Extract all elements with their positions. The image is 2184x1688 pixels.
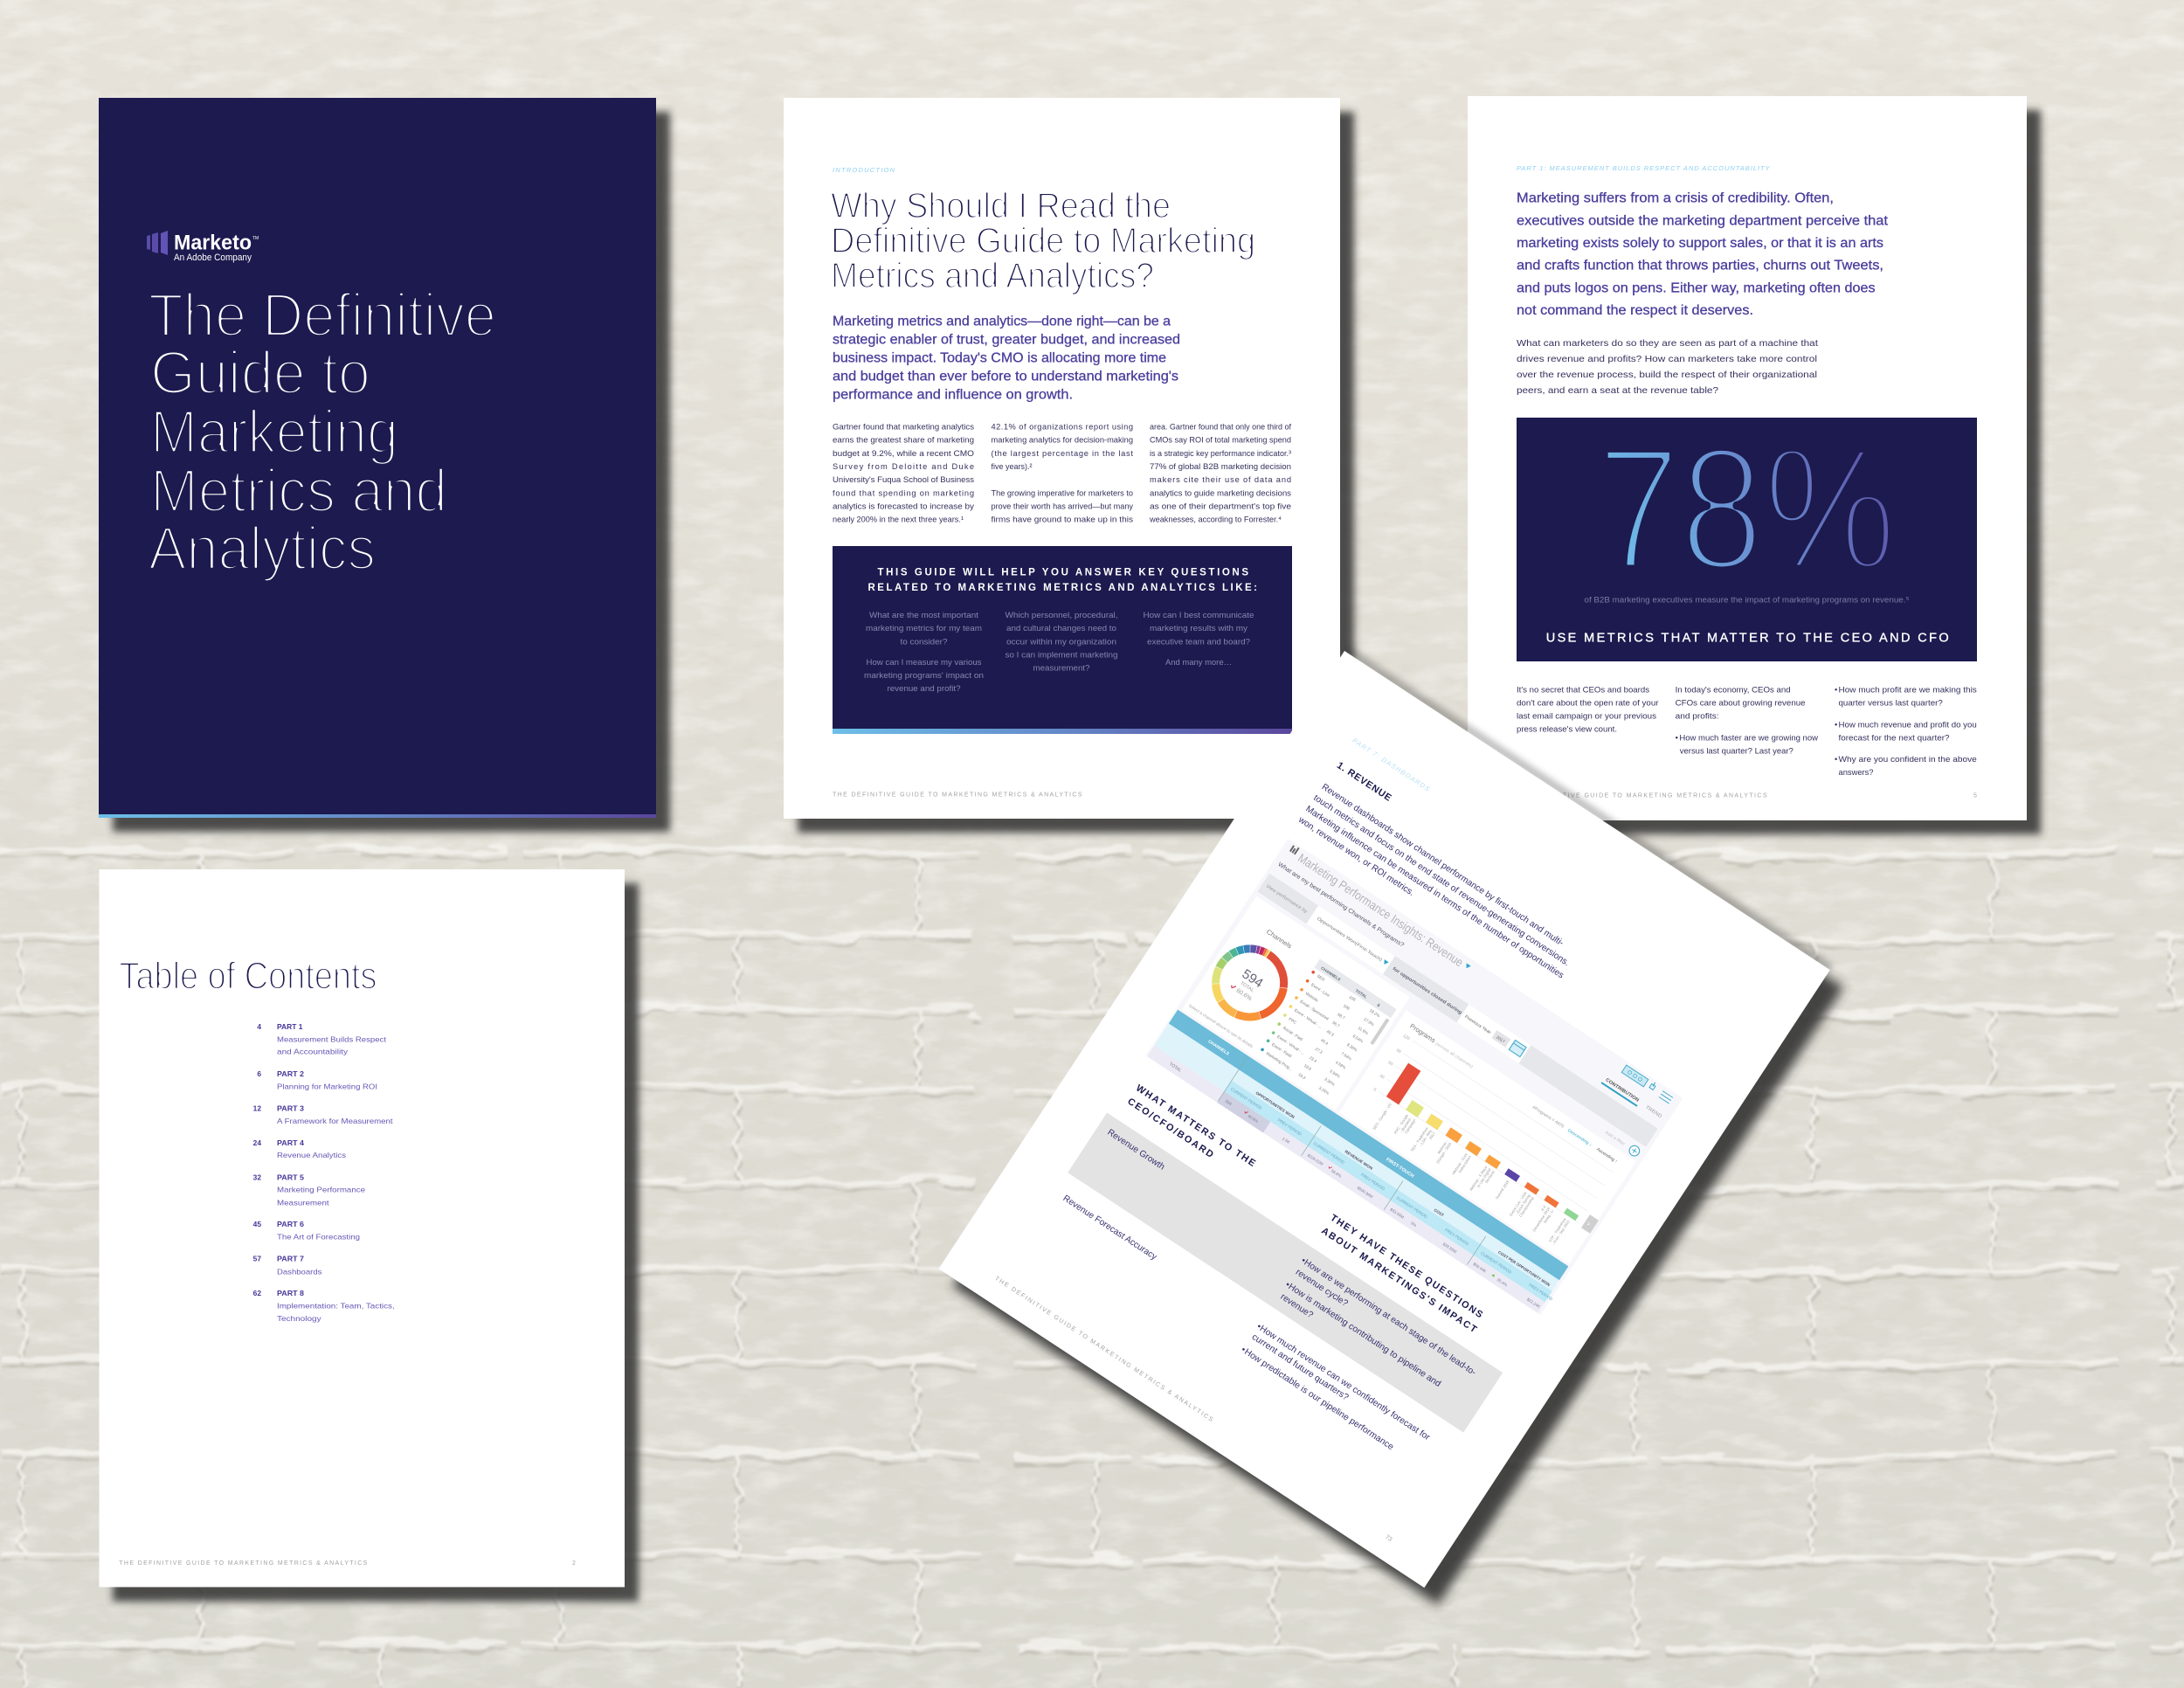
callout: key questions box: And many more…: [1165, 658, 1232, 667]
intro paragraph: Revenue dashboards show channel performance by first-touch and multi-: [1320, 782, 1565, 948]
body column 3: bullets: answers?: [1838, 768, 1873, 777]
programs panel: bar chart: Programs: [1408, 1022, 1437, 1044]
channels table: SEO: [1317, 973, 1326, 982]
first-touch data table: $33.55M: [1442, 1242, 1457, 1254]
intro paragraph: won, revenue won, or ROI metrics.: [1296, 815, 1416, 898]
body column 3: bullets: •: [1835, 686, 1837, 695]
lead paragraph: and crafts function that throws parties, churns out Tweets,: [1517, 259, 1883, 273]
body column 3: bullets: [1835, 686, 1977, 777]
dashboard filter bar: Add a filter: [1604, 1130, 1626, 1147]
contents list: PART 7: [277, 1255, 304, 1263]
dashboard screenshot: [1145, 839, 1684, 1316]
first-touch data table: CURRENT PERIOD: [1230, 1087, 1263, 1110]
section label: INTRODUCTION: [833, 166, 895, 174]
programs panel: bar chart: DGraph - 2016: [1435, 1141, 1453, 1165]
channels table: 9.54%: [1352, 1034, 1364, 1043]
channels table: 19.6: [1303, 1063, 1312, 1071]
lead paragraph: executives outside the marketing department perceive that: [1517, 213, 1889, 228]
lead paragraph: not command the respect it deserves.: [1517, 303, 1753, 318]
first-touch data table: CURRENT PERIOD: [1313, 1141, 1345, 1165]
dashboard filter bar: 2017: [1495, 1035, 1506, 1045]
table row highlight: [1068, 1113, 1503, 1433]
body column 1: don't care about the open rate of your: [1517, 699, 1658, 708]
dashboard filter bar: Opportunities Won(First-Touch): [1316, 917, 1383, 963]
lead paragraph: strategic enabler of trust, greater budget, and increased: [833, 333, 1180, 348]
programs panel: bar chart: Dreamforce 2016: [1531, 1206, 1552, 1233]
dashboard filter bar: for opportunities closed during: [1392, 966, 1462, 1015]
first-touch data table: CURRENT PERIOD: [1480, 1251, 1513, 1275]
dashboard header: Marketing Performance Insights: Revenue: [1296, 851, 1466, 969]
channels table: 11.6%: [1358, 1026, 1369, 1035]
callout: key questions box: revenue and profit?: [888, 684, 961, 693]
page title: Metrics and Analytics?: [831, 255, 1154, 295]
body column 2: •: [1676, 733, 1678, 742]
programs panel: bar chart: YES - Tradeshow: [1410, 1125, 1429, 1152]
contents list: 24: [253, 1138, 261, 1147]
body column 2: The growing imperative for marketers to: [991, 488, 1133, 497]
contents list: 62: [253, 1289, 261, 1297]
programs panel: bar chart: Summit 2018: [1495, 1179, 1510, 1200]
body paragraph: [1517, 338, 1818, 396]
bullets: forecast accuracy questions: How much revenue can we confidently forecast for: [1258, 1324, 1432, 1442]
dashboard toolbar: view, contribution, trend: CONTRIBUTION: [1604, 1077, 1640, 1103]
contents list: PART 8: [277, 1289, 304, 1297]
first-touch data table: PREV PERIOD: [1277, 1117, 1303, 1137]
body column 3: is a strategic key performance indicator.³: [1150, 449, 1291, 458]
programs panel: bar chart: 90: [1395, 1048, 1402, 1055]
callout: key questions box: to consider?: [900, 638, 947, 647]
channels table: Event - Virtual - ...: [1276, 1034, 1305, 1055]
callout: key questions box: RELATED TO MARKETING METRICS AND ANALYTICS LIKE:: [868, 583, 1257, 593]
lead paragraph: [1517, 191, 1889, 318]
intro paragraph: Marketing influence can be measured in terms of the number of opportunities: [1303, 805, 1565, 980]
first-touch data table: OPPORTUNITIES WON: [1255, 1090, 1296, 1120]
bullets: revenue growth questions: •: [1299, 1256, 1308, 1266]
first-touch data table: $56.44K: [1472, 1262, 1488, 1274]
first-touch data table: TOTAL: [1168, 1062, 1183, 1074]
body column 3: bullets: Why are you confident in the above: [1838, 755, 1977, 764]
channels table: 49.3: [1326, 1029, 1335, 1037]
channels table: 106: [1343, 1004, 1351, 1011]
panel: rotated dashboards page: [939, 646, 1834, 1588]
row label: revenue growth: Revenue Growth: [1105, 1128, 1166, 1173]
channels table: 27.3: [1314, 1047, 1324, 1055]
callout: key questions box: marketing results with my: [1150, 624, 1248, 633]
lead paragraph: business impact. Today's CMO is allocating more time: [833, 351, 1166, 366]
first-touch data table: COST PER OPPORTUNITY WON: [1497, 1250, 1552, 1288]
body column 1: earns the greatest share of marketing: [833, 436, 974, 445]
programs panel: bar chart: - Fron - Sep 2015: [1552, 1219, 1571, 1246]
logo: Marketo, An Adobe Company: An Adobe Company: [174, 253, 252, 263]
contents list: PART 1: [277, 1022, 303, 1031]
bullets: forecast accuracy questions: current and future quarters?: [1250, 1332, 1351, 1403]
channels table: PPC: [1288, 1017, 1297, 1025]
body column 1: nearly 200% in the next three years.¹: [833, 515, 964, 523]
channels table: Email - Sponsored: [1299, 1000, 1330, 1021]
cover title: Metrics and: [150, 456, 447, 524]
programs panel: bar chart: - Zurich Spring: [1514, 1193, 1531, 1216]
page title: Definitive Guide to Marketing: [831, 220, 1255, 260]
programs panel: bar chart: - Branded -: [1400, 1116, 1413, 1133]
channels table: Social - Paid: [1282, 1026, 1303, 1041]
body column 2: [991, 423, 1133, 523]
section label: PART 1: MEASUREMENT BUILDS RESPECT AND ACCOUNTABILITY: [1517, 164, 1771, 172]
programs panel: bar chart: (across all channels): [1434, 1041, 1474, 1069]
channels table: 19.3: [1297, 1072, 1307, 1080]
contents list: Marketing Performance: [277, 1185, 365, 1193]
dashboard toolbar: view, contribution, trend: TREND: [1644, 1105, 1662, 1119]
contents list: Planning for Marketing ROI: [277, 1083, 377, 1091]
body column 2: In today's economy, CEOs and: [1676, 685, 1791, 694]
first-touch data table: $500.96M: [1357, 1186, 1374, 1199]
panel: book cover: [99, 98, 656, 818]
page footer: 2: [572, 1560, 576, 1567]
body column 3: analytics to guide marketing decisions: [1150, 488, 1291, 497]
heading: what matters: WHAT MATTERS TO THE: [1134, 1083, 1257, 1169]
channels table: 45.4: [1320, 1038, 1330, 1046]
channels panel: donut chart: 594: [1240, 966, 1266, 991]
contents list: 32: [253, 1173, 261, 1181]
channels table: 4.59%: [1335, 1060, 1346, 1070]
body column 1: press release's view count.: [1517, 725, 1617, 734]
panel: part 1 page: [1468, 96, 2027, 820]
bullets: revenue growth questions: [1276, 1256, 1477, 1413]
page title: Why Should I Read the: [831, 185, 1171, 225]
first-touch data table: PREV PERIOD: [1528, 1283, 1554, 1302]
programs panel: bar chart: A.4.: [1540, 1204, 1547, 1212]
channels table: [1260, 958, 1397, 1101]
contents list: Technology: [277, 1314, 322, 1323]
cover title: The Definitive: [149, 281, 496, 349]
cover title: Guide to: [150, 339, 370, 407]
callout: key questions box: so I can implement marketing: [1005, 651, 1118, 660]
channels table: 7.64%: [1340, 1051, 1352, 1062]
channels table: CHANNELS: [1320, 965, 1341, 982]
contents list: PART 6: [277, 1220, 304, 1228]
row label: revenue forecast accuracy: Revenue Forecast Accuracy: [1061, 1193, 1159, 1263]
first-touch data table: [1147, 1010, 1572, 1316]
body paragraph: drives revenue and profits? How can marketers take more control: [1517, 354, 1817, 364]
body column 2: (the largest percentage in the last: [991, 449, 1133, 458]
first-touch data table: FIRST-TOUCH: [1385, 1157, 1414, 1180]
page footer: [119, 1560, 576, 1567]
contents list: PART 4: [277, 1138, 304, 1147]
body column 1: [1517, 685, 1658, 734]
channels table: $: [1377, 1003, 1381, 1008]
first-touch data table: PREV PERIOD: [1444, 1228, 1470, 1247]
programs panel: bar chart: Event Live - USA: [1509, 1191, 1528, 1217]
cover title: Analytics: [149, 514, 376, 582]
programs panel: bar chart: Webinar - Core: [1451, 1152, 1469, 1175]
intro paragraph: touch metrics and focus on the end state of revenue-generating conversions.: [1311, 793, 1571, 968]
body column 1: Survey from Deloitte and Duke: [833, 462, 974, 471]
first-touch data table: 594: [1225, 1099, 1233, 1106]
programs panel: bar chart: Webinar -: [1436, 1138, 1449, 1155]
programs panel: bar chart: Ascending ↑: [1595, 1147, 1618, 1165]
first-touch data table: $33.55M: [1389, 1207, 1405, 1220]
lead paragraph: performance and influence on growth.: [833, 387, 1073, 402]
channels table: TOTAL: [1355, 988, 1368, 1000]
body column 3: bullets: forecast for the next quarter?: [1838, 733, 1950, 742]
bullets: revenue growth questions: revenue cycle?: [1294, 1268, 1350, 1309]
channels table: 108: [1348, 995, 1357, 1002]
channels table: Event - Virtual - ...: [1294, 1008, 1323, 1029]
programs panel: bar chart: #Programs = 4976: [1531, 1105, 1565, 1130]
contents list: 6: [257, 1069, 261, 1078]
bullets: revenue growth questions: revenue?: [1279, 1292, 1315, 1320]
first-touch data table: CHANNELS: [1206, 1039, 1231, 1057]
section label: PART 7: DASHBOARDS: [1351, 737, 1431, 792]
bullets: forecast accuracy questions: How predictable is our pipeline performance: [1242, 1347, 1395, 1452]
page footer: [992, 1276, 1394, 1543]
programs panel: bar chart: Swag - Li: [1543, 1208, 1554, 1224]
cover title: Marketing: [150, 398, 398, 466]
programs panel: bar chart: 60: [1387, 1060, 1394, 1068]
body column 2: prove their worth has arrived—but many: [991, 502, 1133, 510]
callout: key questions box: and cultural changes need to: [1006, 624, 1116, 633]
bullets: revenue growth questions: How are we performing at each stage of the lead-to-: [1303, 1258, 1477, 1378]
body column 1: budget at 9.2%, while a recent CMO: [833, 449, 974, 458]
body column 3: bullets: quarter versus last quarter?: [1838, 699, 1943, 708]
body column 1: Gartner found that marketing analytics: [833, 423, 974, 432]
programs panel: bar chart: SEO - Google - US: [1372, 1102, 1393, 1131]
callout: key questions box: How can I best communicate: [1143, 611, 1254, 619]
programs panel: bar chart: Championship: [1518, 1195, 1535, 1218]
callout: key questions box: What are the most important: [869, 611, 978, 619]
programs panel: bar chart: PPC - Google: [1393, 1113, 1409, 1135]
channels panel: donut chart: 60.6%: [1235, 988, 1253, 1002]
channels table: Website: [1304, 991, 1319, 1003]
callout: key questions box: How can I measure my various: [867, 658, 982, 667]
contents list: Measurement: [277, 1198, 329, 1207]
channels panel: donut chart: TOTAL: [1240, 981, 1254, 993]
body column 3: 77% of global B2B marketing decision: [1150, 462, 1291, 471]
channels table: 18.2%: [1369, 1008, 1380, 1018]
contents list: The Art of Forecasting: [277, 1232, 360, 1241]
programs panel: bar chart: Webinar - 4 Ways: [1469, 1166, 1488, 1192]
programs panel: bar chart: Subscription: [1457, 1154, 1472, 1173]
lead paragraph: [833, 315, 1180, 402]
contents list: A Framework for Measurement: [277, 1117, 393, 1125]
contents list: [253, 1022, 395, 1323]
programs panel: bar chart: [1339, 1010, 1637, 1264]
logo: Marketo, An Adobe Company: Marketo: [174, 231, 252, 255]
heading: they have these questions: THEY HAVE THESE QUESTIONS: [1328, 1213, 1484, 1320]
contents list: 57: [253, 1255, 261, 1263]
logo: Marketo, An Adobe Company: TM: [252, 236, 259, 241]
body paragraph: What can marketers do so they are seen as part of a machine that: [1517, 338, 1818, 349]
body paragraph: peers, and earn a seat at the revenue table?: [1517, 385, 1718, 396]
body column 2: How much faster are we growing now: [1679, 733, 1818, 742]
page title: Table of Contents: [119, 954, 377, 998]
first-touch data table: PREV PERIOD: [1360, 1173, 1386, 1192]
dashboard filter bar: Previous Year: [1463, 1014, 1492, 1035]
first-touch data table: 56.8%: [1330, 1168, 1342, 1179]
body column 3: area. Gartner found that only one third of: [1150, 423, 1291, 432]
body column 3: weaknesses, according to Forrester.⁴: [1149, 515, 1282, 523]
contents list: 12: [253, 1103, 261, 1112]
channels table: 3.25%: [1318, 1085, 1330, 1096]
bullets: revenue growth questions: •: [1283, 1280, 1291, 1290]
panel: introduction page: [784, 98, 1340, 819]
first-touch data table: 60.6%: [1248, 1114, 1259, 1124]
dashboard filter bar: [1249, 874, 1658, 1159]
programs panel: bar chart: 0: [1372, 1087, 1378, 1093]
body column 3: CMOs say ROI of total marketing spend: [1150, 436, 1291, 445]
contents list: and Accountability: [277, 1047, 349, 1055]
channels table: 56.7: [1331, 1020, 1341, 1028]
body column 3: bullets: How much revenue and profit do you: [1838, 720, 1977, 729]
page footer: THE DEFINITIVE GUIDE TO MARKETING METRICS & ANALYTICS: [993, 1276, 1214, 1423]
bullets: forecast accuracy questions: •: [1239, 1346, 1248, 1355]
programs panel: bar chart: - LSA - May: [1419, 1128, 1433, 1147]
section heading: 1. REVENUE: [1335, 760, 1393, 804]
body column 1: It's no secret that CEOs and boards: [1517, 685, 1649, 694]
programs panel: bar chart: Descending ↓: [1566, 1128, 1593, 1148]
body column 3: bullets: How much profit are we making this: [1838, 686, 1977, 695]
body column 3: as one of their department's top five: [1150, 502, 1291, 510]
programs panel: bar chart: to Use Digital: [1476, 1167, 1492, 1188]
programs panel: bar chart: VTP - Tradeshow: [1548, 1216, 1567, 1243]
bullets: revenue growth questions: How is marketing contributing to pipeline and: [1286, 1282, 1442, 1389]
contents list: PART 2: [277, 1069, 304, 1078]
stat callout: 78%: [1517, 412, 1977, 661]
body column 3: makers cite their use of data and: [1150, 475, 1291, 484]
channels panel: donut chart: Select a channel above to see its details: [1187, 1003, 1254, 1049]
contents list: Measurement Builds Respect: [277, 1034, 387, 1043]
lead paragraph: and budget than ever before to understand marketing's: [833, 369, 1178, 384]
stat callout: 78%: 78%: [1597, 412, 1897, 606]
first-touch data table: 0%: [1410, 1221, 1417, 1228]
programs panel: bar chart: Campaign: [1404, 1117, 1417, 1134]
heading: what matters: CEO/CFO/BOARD: [1125, 1097, 1215, 1160]
page footer: THE DEFINITIVE GUIDE TO MARKETING METRICS & ANALYTICS: [119, 1560, 368, 1567]
contents list: Revenue Analytics: [277, 1151, 346, 1159]
lead paragraph: and puts logos on pens. Either way, marketing often does: [1517, 280, 1876, 295]
body column 1: found that spending on marketing: [833, 488, 974, 497]
first-touch data table: 35.4%: [1496, 1277, 1508, 1287]
first-touch data table: $22.24K: [1526, 1297, 1542, 1310]
lead paragraph: marketing exists solely to support sales, or that it is an arts: [1517, 236, 1883, 251]
contents list: PART 3: [277, 1103, 304, 1112]
callout: key questions box: occur within my organization: [1006, 638, 1116, 647]
first-touch data table: 1.5K: [1282, 1137, 1291, 1145]
heading: they have these questions: ABOUT MARKETINGS'S IMPACT: [1319, 1226, 1479, 1335]
contents list: 45: [253, 1220, 261, 1228]
programs panel: bar chart: 120: [1402, 1034, 1411, 1041]
body column 1: University's Fuqua School of Business: [833, 475, 974, 484]
page footer: 73: [1384, 1534, 1393, 1543]
channels table: Event - Live: [1310, 982, 1330, 998]
body column 2: firms have ground to make up in this: [991, 515, 1133, 523]
body column 2: five years).²: [991, 462, 1033, 471]
callout: key questions box: marketing metrics for my team: [866, 624, 982, 633]
contents list: PART 5: [277, 1173, 304, 1181]
body column 3: [1149, 423, 1291, 523]
bullets: forecast accuracy questions: •: [1254, 1322, 1263, 1332]
page footer: THE DEFINITIVE GUIDE TO MARKETING METRICS & ANALYTICS: [833, 792, 1082, 799]
channels table: 8.30%: [1346, 1042, 1358, 1053]
body column 2: CFOs care about growing revenue: [1676, 699, 1806, 708]
body column 2: versus last quarter? Last year?: [1680, 747, 1794, 756]
body column 2: 42.1% of organizations report using: [991, 423, 1133, 432]
body column 1: [833, 423, 974, 523]
channels table: 3.94%: [1329, 1069, 1341, 1079]
page footer: THE DEFINITIVE GUIDE TO MARKETING METRICS & ANALYTICS: [1517, 793, 1767, 799]
callout: key questions box: [833, 546, 1292, 734]
callout: key questions box: marketing programs' impact on: [864, 671, 984, 680]
body column 2: [1676, 685, 1818, 756]
programs panel: bar chart: 30: [1379, 1074, 1386, 1081]
lead paragraph: Marketing metrics and analytics—done right—can be a: [833, 315, 1171, 329]
programs panel: bar chart: Demand: [1484, 1169, 1496, 1184]
body column 3: bullets: •: [1835, 755, 1837, 764]
stat callout: 78%: of B2B marketing executives measure the impact of marketing programs on revenue.⁵: [1585, 595, 1910, 605]
first-touch data table: CURRENT PERIOD: [1395, 1195, 1428, 1220]
callout: key questions box: Which personnel, procedural,: [1005, 611, 1118, 619]
dashboard header: What are my best performing Channels & Programs?: [1276, 861, 1405, 949]
dashboard filter bar: View performance by: [1265, 884, 1308, 915]
channels table: 23.4: [1309, 1055, 1317, 1063]
first-touch data table: COST: [1433, 1207, 1445, 1218]
channels table: Marketing Prog...: [1265, 1051, 1293, 1071]
dashboard toolbar: view, contribution, trend: [1600, 1058, 1676, 1121]
body column 2: marketing analytics for decision-making: [991, 436, 1133, 445]
first-touch data table: $226.02M: [1307, 1153, 1324, 1166]
page footer: [1517, 793, 1977, 799]
panel: table of contents page: [100, 869, 625, 1587]
channels table: 17.8%: [1363, 1017, 1375, 1027]
channels table: 68.7: [1337, 1013, 1346, 1020]
programs panel: bar chart: ›: [1586, 1219, 1593, 1228]
contents list: Implementation: Team, Tactics,: [277, 1301, 395, 1310]
contents list: Dashboards: [277, 1267, 321, 1276]
channels table: Event - Field: [1271, 1042, 1293, 1059]
lead paragraph: Marketing suffers from a crisis of credibility. Often,: [1517, 191, 1834, 206]
first-touch data table: REVENUE WON: [1344, 1149, 1374, 1171]
body column 3: bullets: •: [1835, 720, 1837, 729]
channels panel: donut chart: [1182, 896, 1410, 1110]
logo: Marketo, An Adobe Company: [147, 231, 259, 263]
cover title: [149, 281, 496, 582]
page title: [831, 185, 1255, 295]
callout: key questions box: THIS GUIDE WILL HELP YOU ANSWER KEY QUESTIONS: [877, 568, 1248, 578]
body column 2: and profits:: [1676, 712, 1719, 721]
body column 1: analytics is forecasted to increase by: [833, 502, 974, 510]
body column 1: last email campaign or your previous: [1517, 712, 1656, 721]
callout: key questions box: measurement?: [1033, 664, 1090, 673]
stat callout: 78%: USE METRICS THAT MATTER TO THE CEO AND CFO: [1546, 632, 1949, 646]
callout: key questions box: executive team and board?: [1147, 638, 1250, 647]
channels table: 3.30%: [1324, 1076, 1336, 1087]
channels panel: donut chart: Channels: [1265, 928, 1294, 951]
body paragraph: over the revenue process, build the respect of their organizational: [1517, 370, 1817, 380]
contents list: 4: [257, 1022, 261, 1031]
page footer: 5: [1973, 793, 1977, 799]
programs panel: bar chart: 2017: [1428, 1131, 1436, 1140]
